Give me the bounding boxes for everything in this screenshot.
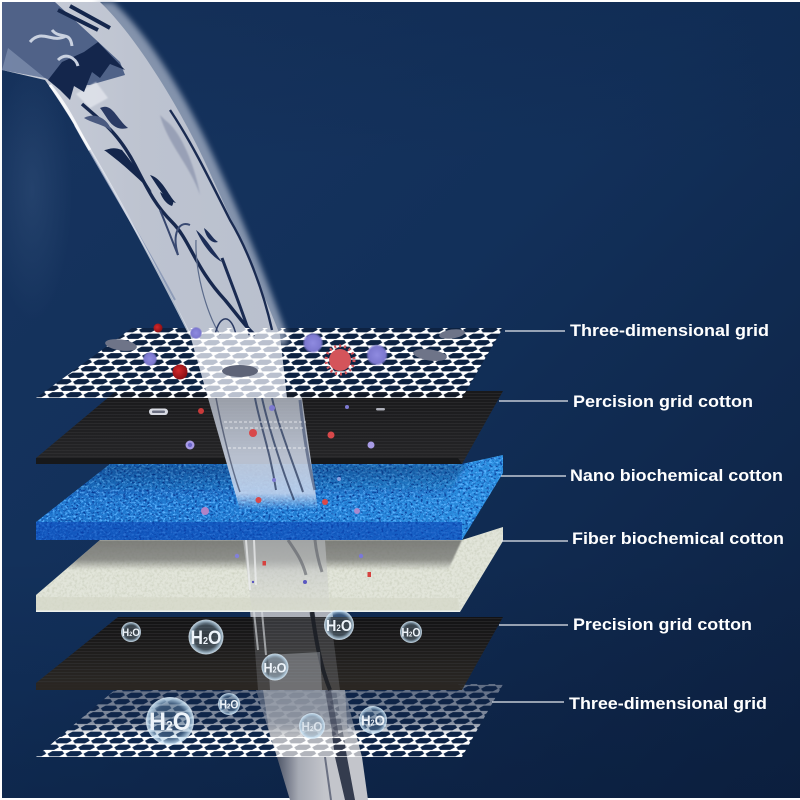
layer 6: three-dimensional grid (bottom): [36, 684, 503, 757]
layer 5: precision grid cotton: [36, 612, 503, 690]
label: three-dimensional grid (bottom): Three-dimensional grid: [569, 694, 767, 713]
label: precision grid cotton: Precision grid cotton: [573, 615, 752, 634]
water molecule bubbles: [121, 610, 422, 745]
layer 3: nano biochemical cotton: [30, 455, 503, 540]
water molecule bubbles: H2O: [220, 698, 238, 712]
water stream: middle, crossing cotton layers: [208, 398, 318, 510]
water molecule bubbles: H2O: [190, 628, 222, 649]
water molecule bubbles: H2O: [264, 660, 287, 676]
label: three-dimensional grid (top): Three-dimensional grid: [570, 321, 769, 340]
contaminant particles on layer 2: [149, 405, 385, 450]
water stream: lower section: [250, 610, 368, 800]
layer 1: three-dimensional grid (top): [36, 328, 503, 398]
label: nano biochemical cotton: Nano biochemical cotton: [570, 466, 783, 485]
layer 4: fiber biochemical cotton: [36, 527, 503, 612]
label: fiber biochemical cotton: Fiber biochemical cotton: [572, 529, 784, 548]
water molecule bubbles: H2O: [361, 712, 385, 730]
water stream: upper section: [2, 2, 287, 398]
contaminant particles on layer 1: [104, 324, 465, 380]
water molecule bubbles: H2O: [402, 626, 420, 640]
water molecule bubbles: H2O: [122, 627, 140, 639]
water molecule bubbles: H2O: [149, 708, 191, 736]
label: percision grid cotton: Percision grid cotton: [573, 392, 753, 411]
layer 2: percision grid cotton: [36, 391, 503, 464]
water molecule bubbles: H2O: [326, 618, 352, 635]
water molecule bubbles: H2O: [302, 719, 322, 734]
contaminant particles on layer 3: [201, 477, 360, 515]
